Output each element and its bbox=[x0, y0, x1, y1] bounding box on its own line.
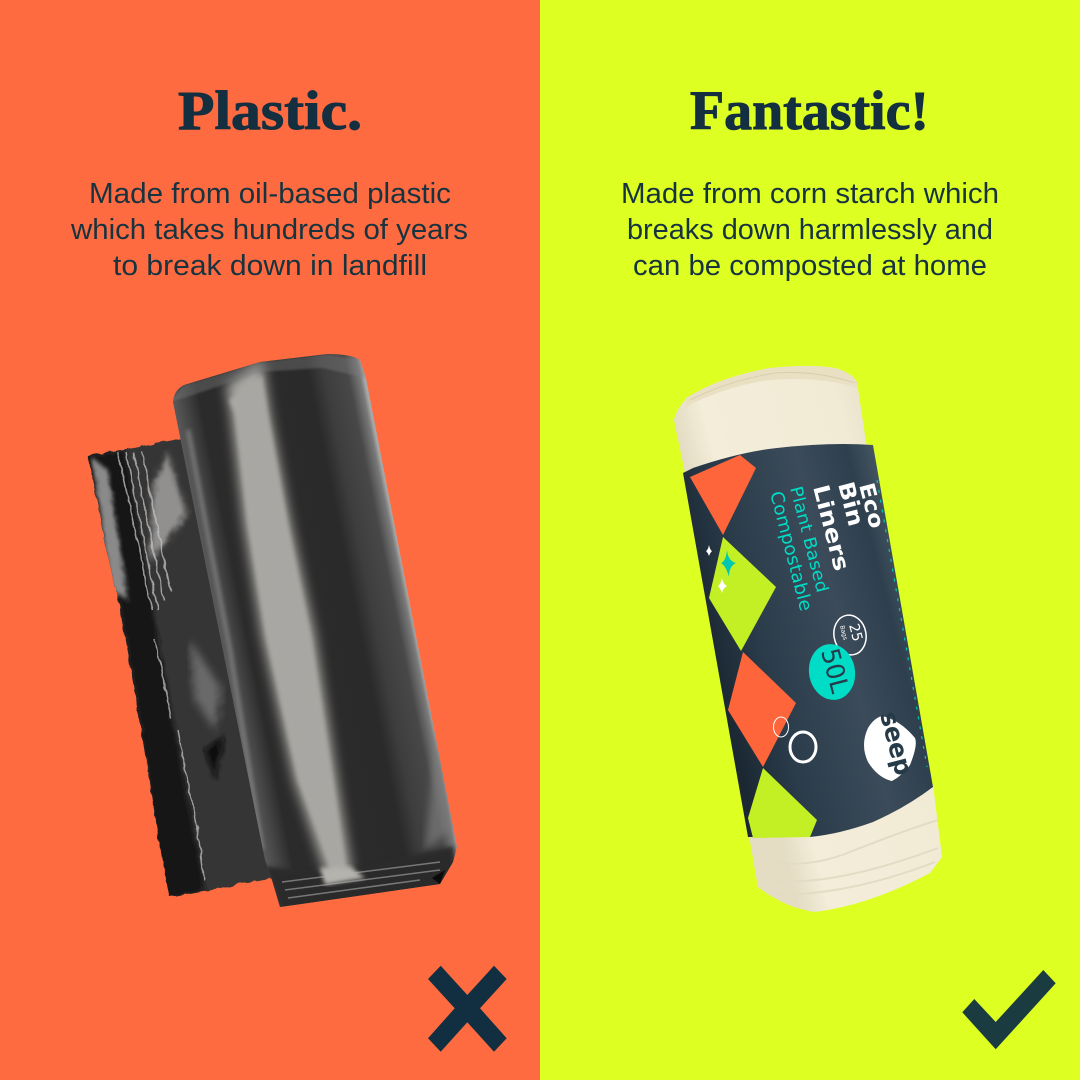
cream roll ends bbox=[674, 366, 873, 490]
product name text: Liners bbox=[807, 482, 853, 574]
illustration: compostable Eco Bin Liners roll bbox=[674, 366, 942, 912]
panel: fantastic background bbox=[540, 0, 1080, 1080]
badge: 25 bags bbox=[831, 613, 869, 657]
badge: 50L bbox=[804, 640, 860, 704]
product name text bbox=[765, 479, 889, 613]
text block: fantastic description: Made from corn starch which bbox=[621, 178, 999, 210]
text block: plastic description: which takes hundreds of years bbox=[70, 214, 468, 246]
orange diamond bottom bbox=[728, 652, 796, 767]
text block: plastic description bbox=[70, 178, 468, 282]
text block: plastic description: Made from oil-based plastic bbox=[89, 178, 451, 210]
badge: 50L: 50L bbox=[815, 645, 855, 696]
sparkle icons bbox=[706, 545, 736, 593]
dark product label band bbox=[683, 444, 933, 837]
heading: Fantastic: Fantastic! bbox=[690, 80, 929, 141]
main cylinder bbox=[173, 354, 457, 907]
icon: cross bbox=[428, 966, 507, 1052]
lime diamond bottom bbox=[748, 768, 817, 838]
text block: plastic description: to break down in landfill bbox=[113, 250, 427, 282]
illustration: black plastic bin liner roll bbox=[80, 340, 470, 920]
teal edge text bbox=[877, 480, 927, 767]
loose flap of plastic bbox=[88, 439, 272, 896]
text block: fantastic description bbox=[621, 178, 999, 282]
text block: fantastic description: breaks down harmlessly and bbox=[627, 214, 993, 246]
product name text: Bin bbox=[832, 479, 868, 529]
badge: 25 bags: 25 bbox=[845, 622, 865, 643]
product name text: Compostable bbox=[765, 489, 816, 613]
icon: check mark bbox=[962, 970, 1056, 1049]
product name text: Plant Based bbox=[785, 484, 832, 595]
lime diamond top bbox=[709, 537, 776, 651]
heading: Plastic: Plastic. bbox=[178, 80, 362, 141]
badge: 25 bags: Bags bbox=[838, 625, 849, 641]
decorative circles bbox=[774, 717, 816, 762]
product name text: Eco bbox=[854, 480, 889, 531]
text block: fantastic description: can be composted at home bbox=[633, 250, 987, 282]
panel: plastic background bbox=[0, 0, 540, 1080]
logo: seep: seep bbox=[874, 708, 919, 778]
orange diamond top bbox=[690, 455, 756, 535]
